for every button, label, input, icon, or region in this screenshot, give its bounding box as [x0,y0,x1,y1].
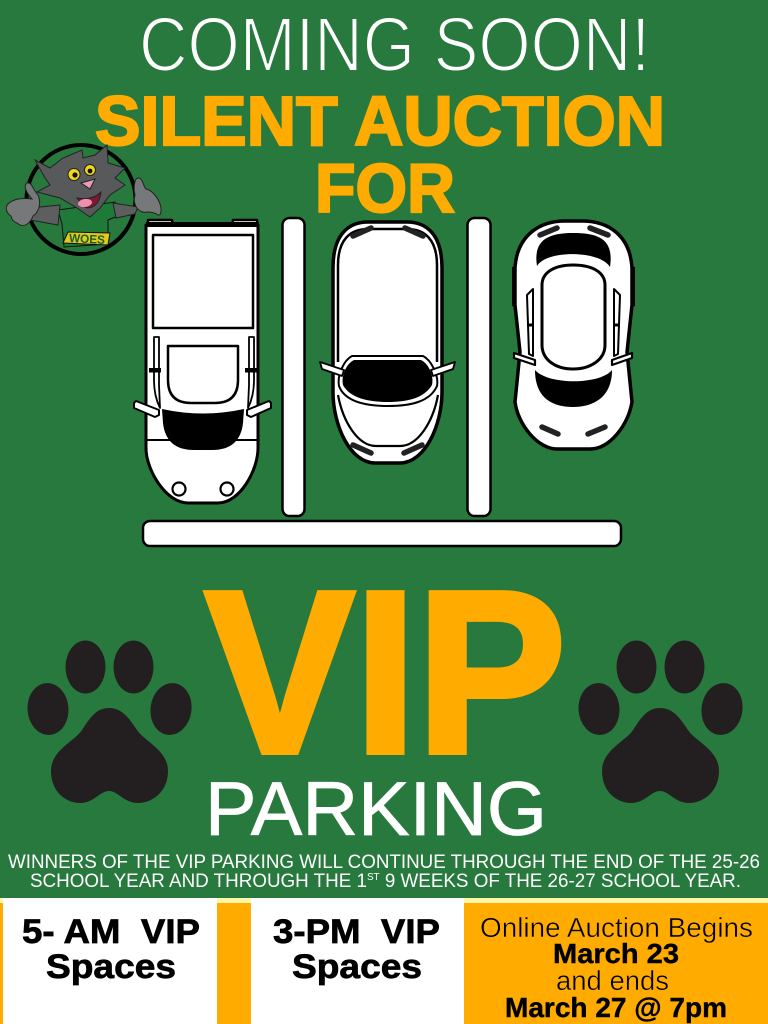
icon: sports car top view [512,221,635,449]
panel: auction dates: March 23 [553,938,679,969]
panel: auction dates: Online Auction Begins [480,912,753,943]
cat eyes [68,164,96,180]
text block: winners note: 9 WEEKS OF THE 26-27 SCHOOL YEAR. [380,871,741,892]
panel: PM spaces: 3-PM VIP [273,913,440,951]
cat tongue [78,198,92,208]
panel: PM spaces [251,898,464,1024]
panel: bottom band [0,898,768,1024]
text block: winners note: ST [367,872,380,883]
cat nose [81,179,95,189]
panel: auction dates [480,912,753,1023]
panel: PM spaces: Spaces [292,948,422,986]
cat shirt [58,202,118,247]
heading: for: FOR [315,150,455,227]
divider: right parking line [468,218,490,516]
icon: right paw print [577,640,746,803]
divider: horizontal parking line [143,521,621,546]
panel: auction dates: and ends [556,965,669,996]
icon: pickup truck top view [134,220,271,503]
heading: silent auction: SILENT AUCTION [95,82,665,160]
heading: coming soon: COMING SOON! [139,2,650,88]
divider: left parking line [282,218,304,516]
text block: winners note: WINNERS OF THE VIP PARKING WILL CONTINUE THROUGH THE END OF THE 25-26 [8,852,760,873]
panel: AM spaces: Spaces [46,948,176,986]
cat head [35,145,125,217]
panel: auction dates: March 27 @ 7pm [505,992,727,1023]
text block: winners note [8,852,760,892]
panel: AM spaces [3,898,217,1024]
icon: left paw print [26,640,195,803]
title: VIP: VIP [205,543,566,801]
cat mouth [77,192,101,208]
shirt label: WOES [69,231,105,247]
text block: winners note: SCHOOL YEAR AND THROUGH THE 1 [30,871,370,892]
icon: cat mascot logo [6,145,161,254]
icon: sedan top view [320,222,455,463]
title: parking: PARKING [205,767,547,852]
cat arms and hands [6,178,161,226]
panel: AM spaces: 5- AM VIP [22,913,200,951]
